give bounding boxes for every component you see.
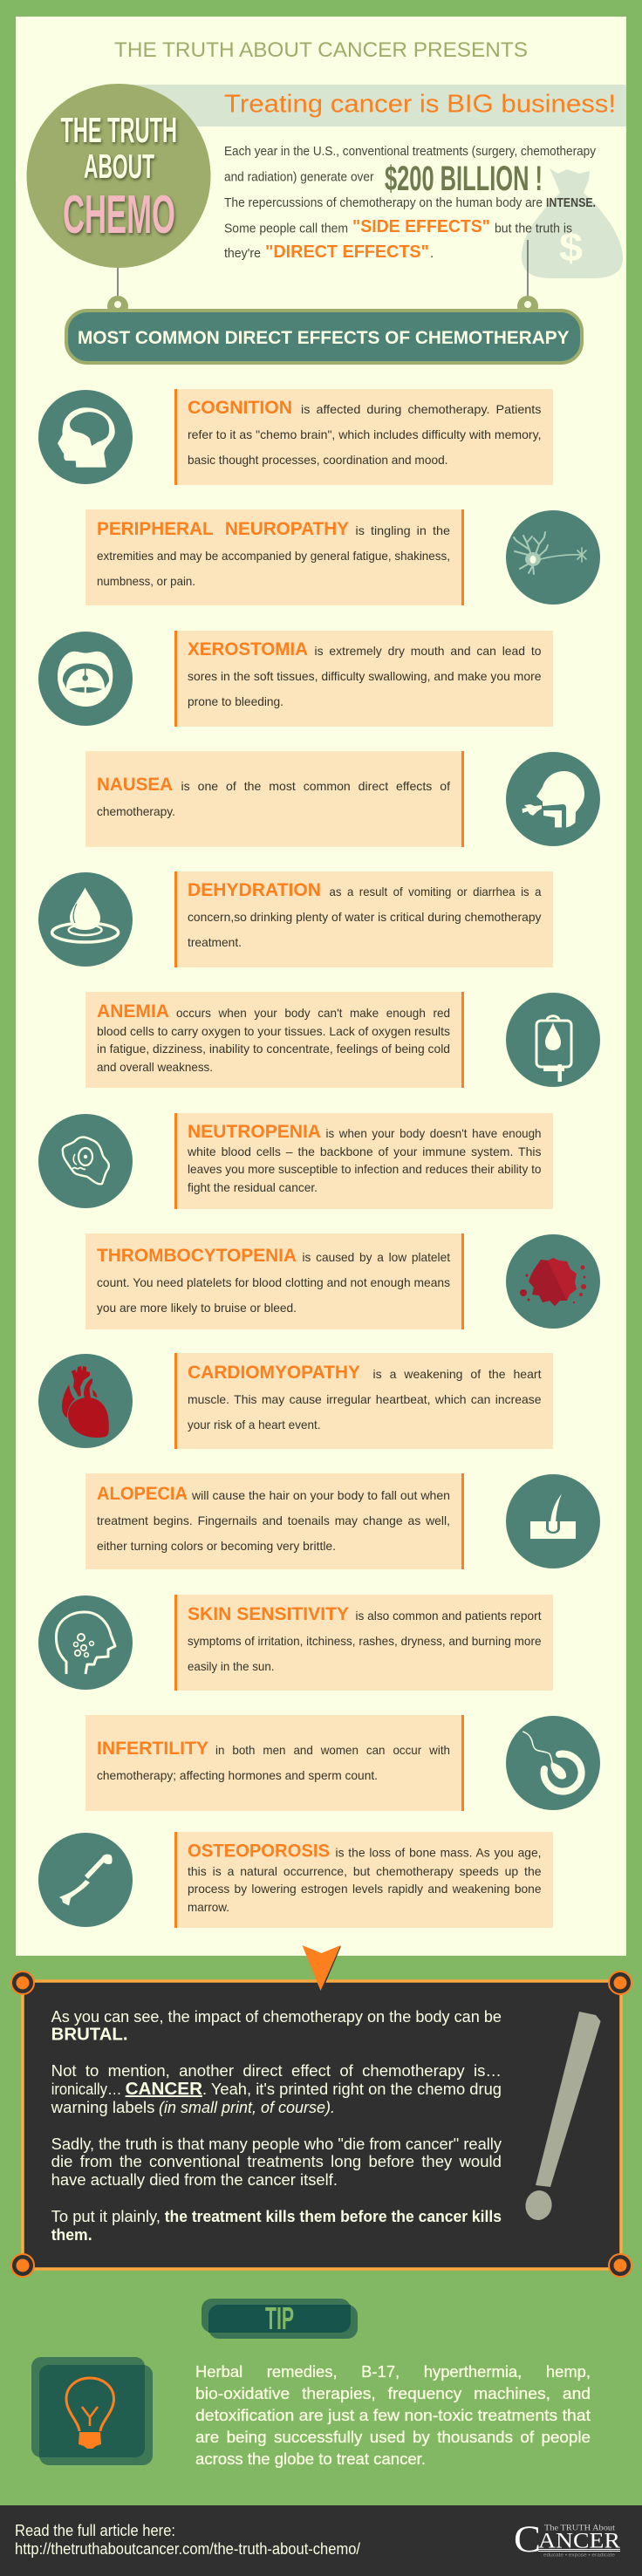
logo: the truth about cancer (514, 2519, 620, 2560)
text box: XEROSTOMIA (188, 639, 308, 659)
conclusion text: To put it plainly, (51, 2208, 160, 2225)
intro text: . (430, 246, 434, 261)
arrow: down to conclusion (302, 1945, 341, 1992)
conclusion text: ironically… (51, 2081, 122, 2098)
text box: is the loss of bone mass. As you age, (335, 1846, 541, 1860)
text box: concern,so drinking plenty of water is critical during chemotherapy (188, 910, 541, 924)
text box: is a weakening of the heart (373, 1367, 542, 1381)
footer (0, 2505, 642, 2576)
badge: the truth about chemo: ABOUT (84, 148, 154, 186)
text box: will cause the hair on your body to fall out when (191, 1488, 450, 1502)
text box (174, 631, 553, 727)
icon: cell (38, 1114, 133, 1208)
panel: dehydration (38, 871, 553, 967)
text box: is caused by a low platelet (302, 1250, 450, 1264)
intro text: and radiation) generate over (224, 169, 373, 185)
text box (174, 871, 553, 967)
text box: this is a natural occurrence, but chemotherapy speeds up the (188, 1864, 542, 1878)
intro text (224, 144, 596, 262)
conclusion text: (in small print, of course). (159, 2099, 335, 2116)
text box: NEUTROPENIA (188, 1122, 321, 1142)
text box: is also common and patients report (356, 1609, 542, 1623)
icon: head with brain (38, 390, 133, 484)
panel: skin sensitivity (38, 1595, 553, 1691)
icon: sperm and egg (506, 1716, 600, 1810)
text box: SKIN SENSITIVITY (188, 1604, 349, 1624)
text box (85, 992, 464, 1088)
text box (85, 1715, 464, 1811)
text box: DEHYDRATION (188, 880, 321, 900)
conclusion text: Sadly, the truth is that many people who "die from cancer" really (51, 2135, 502, 2153)
text box: is tingling in the (356, 523, 450, 537)
panel: thrombocytopenia (85, 1233, 600, 1329)
text box (174, 1113, 553, 1209)
icon: water drop (38, 872, 133, 967)
cream main panel (16, 17, 626, 1956)
icon: blood splatter (506, 1234, 600, 1329)
badge: the truth about chemo (26, 84, 211, 268)
conclusion text (51, 2008, 502, 2244)
panel: infertility (85, 1715, 600, 1811)
conclusion text: them. (51, 2226, 92, 2244)
banner: treating cancer (131, 85, 626, 126)
heading sign: MOST COMMON DIRECT EFFECTS OF CHEMOTHERAPY (78, 328, 569, 348)
text box: either turning colors or becoming very brittle. (97, 1539, 336, 1553)
panel: conclusion (11, 1971, 632, 2277)
text box: you are more likely to bruise or bleed. (97, 1301, 297, 1315)
conclusion text: As you can see, the impact of chemotherapy on the body can be (51, 2008, 502, 2026)
text box: is extremely dry mouth and can lead to (314, 644, 542, 658)
text box (85, 509, 464, 605)
icon: light bulb (31, 2357, 153, 2465)
text box: is one of the most common direct effects of (181, 779, 450, 793)
corner rivets (11, 1971, 632, 2277)
text box: THROMBOCYTOPENIA (97, 1246, 297, 1266)
tip heading: TIP (265, 2300, 294, 2336)
text box: as a result of vomiting or diarrhea is a (330, 885, 542, 899)
text box: COGNITION (188, 398, 292, 418)
panel: nausea (85, 751, 600, 847)
text box: is when your body doesn't have enough (326, 1126, 541, 1140)
hanging strings and rings (107, 240, 538, 317)
text box: marrow. (188, 1900, 229, 1914)
panel: xerostomia (38, 631, 553, 727)
icon: money bag: $ (559, 224, 583, 270)
footer source link (15, 2522, 360, 2558)
text box: your risk of a heart event. (188, 1418, 321, 1431)
text box: basic thought processes, coordination and mood. (188, 453, 448, 467)
text box (85, 1233, 464, 1329)
text box: treatment begins. Fingernails and toenails may change as well, (97, 1513, 450, 1527)
text box: PERIPHERAL NEUROPATHY (97, 519, 349, 539)
text box: muscle. This may cause irregular heartbeat, which can increase (188, 1392, 542, 1406)
icon: exclamation mark (523, 2012, 601, 2222)
text box: refer to it as "chemo brain", which includes difficulty with memory, (188, 427, 541, 441)
text box: INFERTILITY (97, 1739, 208, 1759)
icon: heart (38, 1354, 133, 1448)
text box: extremities and may be accompanied by general fatigue, shakiness, (97, 549, 450, 563)
text box: CARDIOMYOPATHY (188, 1363, 360, 1383)
text box: in fatigue, dizziness, inability to concentrate, feelings of being cold (97, 1042, 450, 1056)
icon: hair follicle (506, 1474, 600, 1568)
conclusion text: the treatment kills them before the cancer kills (165, 2208, 502, 2225)
text box (174, 1832, 553, 1928)
text box: sores in the soft tissues, difficulty swallowing, and make you more (188, 669, 542, 683)
icon: open mouth (38, 632, 133, 726)
text box (174, 1595, 553, 1691)
text box: occurs when your body can't make enough red (176, 1006, 450, 1020)
text box: is affected during chemotherapy. Patients (301, 402, 541, 416)
intro text: INTENSE. (546, 195, 596, 210)
panel: cognition (38, 389, 553, 485)
text box (174, 1353, 553, 1449)
text box: ANEMIA (97, 1001, 169, 1022)
conclusion text: CANCER (126, 2080, 203, 2099)
text box: process by lowering estrogen levels rapidly and weakening bone (188, 1882, 542, 1896)
text box: numbness, or pain. (97, 574, 195, 588)
intro text: Some people call them (224, 222, 348, 236)
heading sign (66, 311, 582, 363)
icon: money bag (522, 168, 623, 278)
text box: prone to bleeding. (188, 694, 283, 708)
icon: head with rash (38, 1595, 133, 1690)
text box: OSTEOPOROSIS (188, 1841, 330, 1862)
panel: anemia (85, 992, 600, 1088)
footer source link: Read the full article here: (15, 2522, 175, 2539)
text box: fight the residual cancer. (188, 1180, 318, 1194)
text box: leaves you more susceptible to infection and reduces their ability to (188, 1162, 542, 1176)
panel: peripheral neuropathy (85, 509, 600, 605)
conclusion text: . Yeah, it's printed right on the chemo drug (202, 2081, 502, 2098)
intro text: but the truth is (495, 222, 572, 236)
text box: white blood cells – the backbone of your immune system. This (187, 1145, 542, 1158)
icon: neuron (506, 510, 600, 605)
logo: the truth about cancer: educate • expose • eradicate (543, 2552, 615, 2558)
icon: broken bone (38, 1833, 133, 1927)
intro text: The repercussions of chemotherapy on the human body are (224, 195, 543, 210)
footer source link: http://thetruthaboutcancer.com/the-truth-about-chemo/ (15, 2540, 360, 2558)
panel: cardiomyopathy (38, 1353, 553, 1449)
tip text: are being successfully used by thousands of people (195, 2429, 591, 2446)
badge: the truth about chemo: THE TRUTH (61, 110, 177, 150)
icon: IV bag (506, 993, 600, 1087)
logo: the truth about cancer: ANCER (538, 2530, 620, 2553)
tip text (195, 2363, 591, 2468)
text box (85, 1473, 464, 1569)
panel: osteoporosis (38, 1832, 553, 1928)
intro text: Each year in the U.S., conventional treatments (surgery, chemotherapy (224, 144, 596, 159)
conclusion text: Not to mention, another direct effect of chemotherapy is… (51, 2062, 502, 2080)
icon: person vomiting (506, 752, 600, 846)
text box: chemotherapy; affecting hormones and sperm count. (97, 1768, 378, 1782)
conclusion text: BRUTAL. (51, 2026, 128, 2045)
intro text: $200 BILLION ! (385, 160, 543, 198)
text box: chemotherapy. (97, 804, 175, 818)
panel: neutropenia (38, 1113, 553, 1209)
conclusion text: die from the conventional treatments long before they would (51, 2153, 502, 2170)
tip heading (201, 2299, 358, 2339)
logo: the truth about cancer: The TRUTH About (544, 2525, 615, 2533)
tip text: detoxification are just a few non-toxic treatments that (195, 2407, 591, 2424)
intro text: "SIDE EFFECTS" (352, 217, 490, 236)
text box: ALOPECIA (97, 1484, 188, 1504)
text box (174, 389, 553, 485)
text box (85, 751, 464, 847)
tip text: Herbal remedies, B-17, hyperthermia, hemp, (195, 2363, 591, 2381)
banner: treating cancer: Treating cancer is BIG business! (224, 91, 616, 119)
text box: symptoms of irritation, itchiness, rashes, dryness, and burning more (188, 1634, 542, 1648)
text box: in both men and women can occur with (215, 1743, 450, 1757)
conclusion text: warning labels (51, 2099, 154, 2116)
text box: count. You need platelets for blood clotting and not enough means (97, 1275, 450, 1289)
title: THE TRUTH ABOUT CANCER PRESENTS (114, 38, 528, 62)
panel: alopecia (85, 1473, 600, 1569)
conclusion text: have actually died from the cancer itself. (51, 2171, 338, 2189)
intro text: they're (224, 246, 261, 261)
text box: treatment. (188, 935, 242, 949)
tip text: across the globe to treat cancer. (195, 2450, 426, 2468)
intro text: "DIRECT EFFECTS" (265, 243, 429, 262)
text box: blood cells to carry oxygen to your tissues. Lack of oxygen results (97, 1024, 450, 1038)
tip text: bio-oxidative therapies, frequency machines, and (195, 2385, 591, 2402)
logo: the truth about cancer: C (514, 2519, 541, 2560)
text box: NAUSEA (97, 775, 173, 795)
badge: the truth about chemo: CHEMO (63, 185, 175, 245)
text box: and overall weakness. (97, 1060, 213, 1074)
text box: easily in the sun. (188, 1659, 274, 1673)
